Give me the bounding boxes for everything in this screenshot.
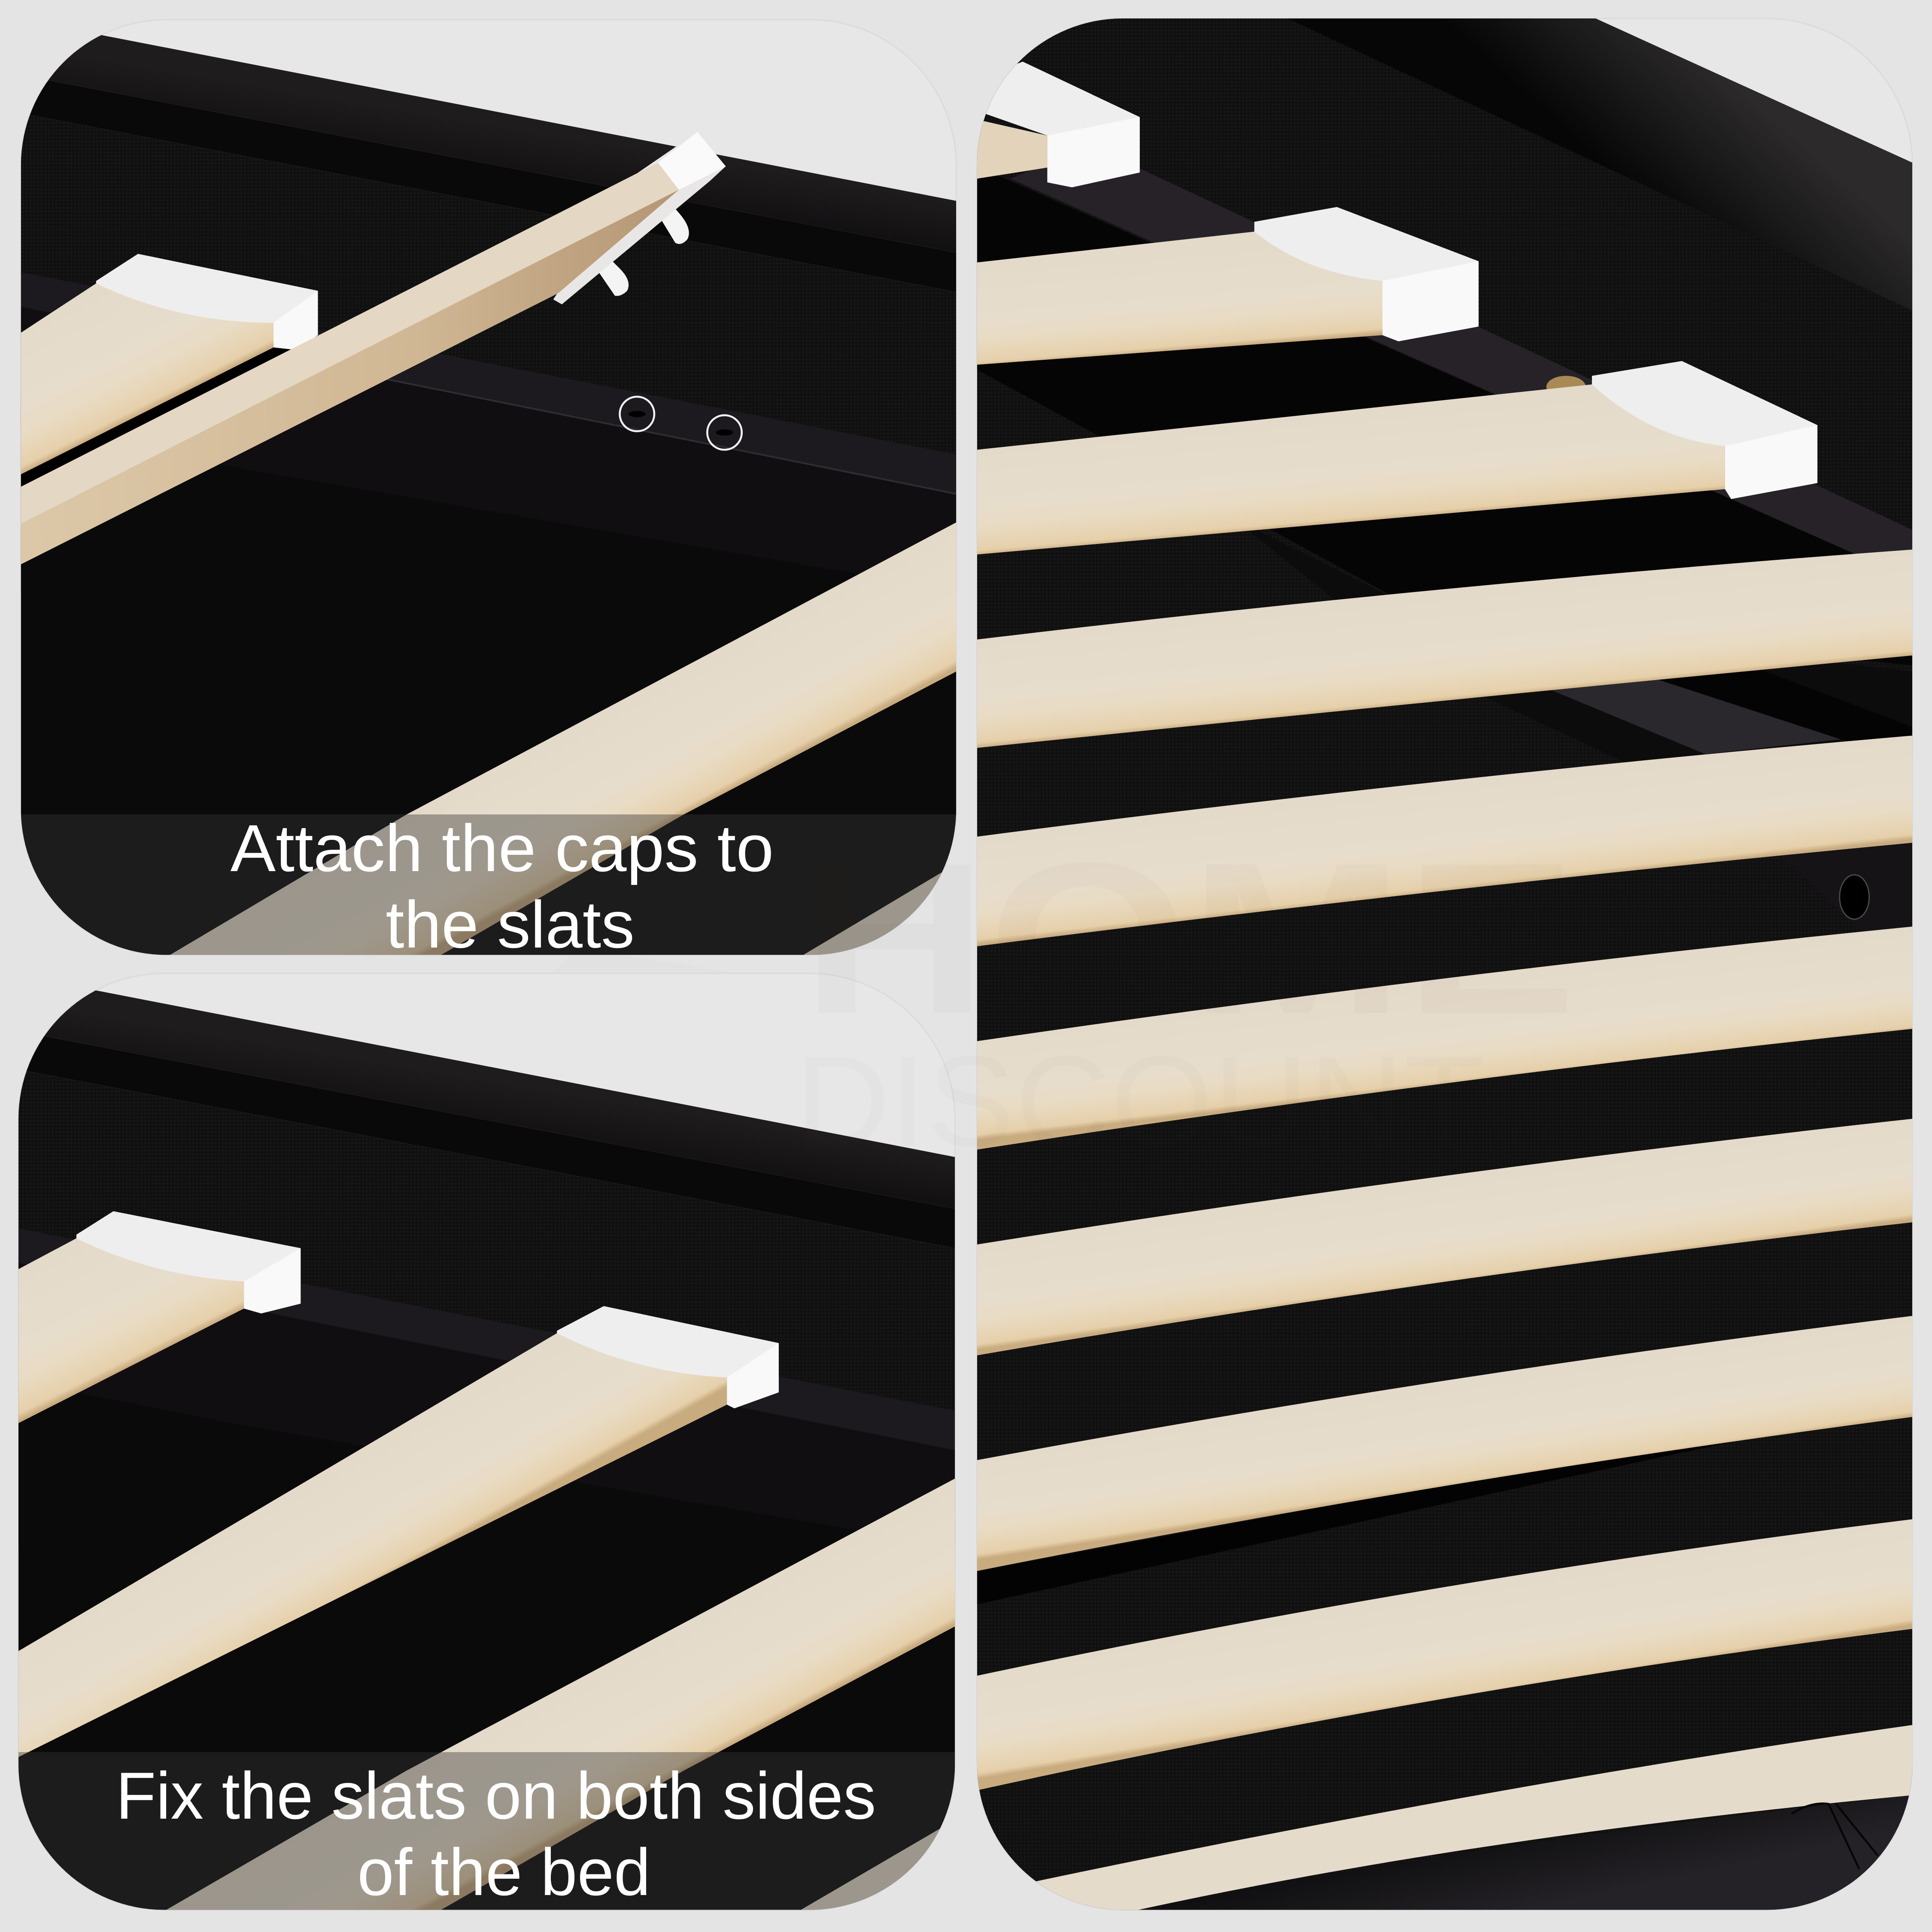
frame tube [1545,679,1841,754]
hole marker circles [620,397,742,450]
rail top face [21,272,957,494]
leather top face [18,976,955,1209]
under-rail shadow [977,166,1912,665]
slat lower [166,1479,955,1910]
peg lower [596,260,629,296]
caption: Fix the slats on both sides [116,1759,876,1833]
fitted cap left [76,1211,301,1313]
caption [116,1759,876,1909]
lower fabric [18,1363,955,1910]
brass bolt [1546,376,1586,398]
upper fabric [21,113,956,592]
lower fabric [21,407,956,955]
watermark house icon [394,949,739,1109]
dark bed interior [977,18,1912,1910]
fitted end cap [96,254,318,350]
caption band [21,814,956,955]
slat 10 [977,1725,1912,1910]
corner slat [803,864,956,955]
caption: the slats [386,887,635,962]
leather lower face [21,75,956,292]
screw hole right [716,429,733,436]
slat 8 [977,1316,1912,1571]
lower frame recess [1232,517,1912,850]
rail highlight [382,378,957,494]
shadow gap between slats [21,347,296,490]
slat 7 [977,1119,1912,1355]
caption: Attach the caps to [231,811,774,885]
caption [231,811,774,962]
watermark: HOME [801,818,1577,1059]
panel: fix the slats [18,973,955,1910]
shadow band [977,1417,1848,1604]
raised cap plate [553,132,726,304]
peg upper [658,206,689,244]
leather top face [21,20,956,252]
leather lower face [18,1031,955,1248]
slat 5 [977,735,1912,946]
screw hole left [629,411,646,417]
slat 9 [977,1519,1912,1790]
lower slat [170,522,956,955]
slat 6 [977,927,1912,1150]
caption: of the bed [357,1835,650,1909]
slat 1 with cap [977,61,1140,187]
fitted slat [21,283,273,474]
fitted cap middle [557,1306,779,1408]
watermark [795,818,1577,1173]
bracket with bolt [1774,838,1912,936]
dark frame beam [1656,665,1912,758]
footboard seam [1792,1804,1878,1869]
metal rail [1010,146,1912,579]
leather footboard [1139,1795,1912,1910]
watermark: DISCOUNT [795,1029,1485,1173]
slat 3 with cap [977,361,1817,554]
leather headboard [1288,18,1912,310]
cap top [658,132,726,190]
rail top face [18,1228,955,1450]
caption band [18,1752,955,1910]
panel: attach the caps [21,20,957,962]
corner slat [801,1820,955,1910]
slat 4 [977,550,1912,748]
upper fabric [18,1069,955,1548]
panel: all slats fitted [977,18,1912,1910]
raised slat [21,163,679,564]
slat left [18,1238,244,1423]
slat middle [18,1333,727,1757]
rail front face [18,1263,955,1550]
slat 2 with cap [977,207,1479,365]
rail front face [21,307,957,594]
